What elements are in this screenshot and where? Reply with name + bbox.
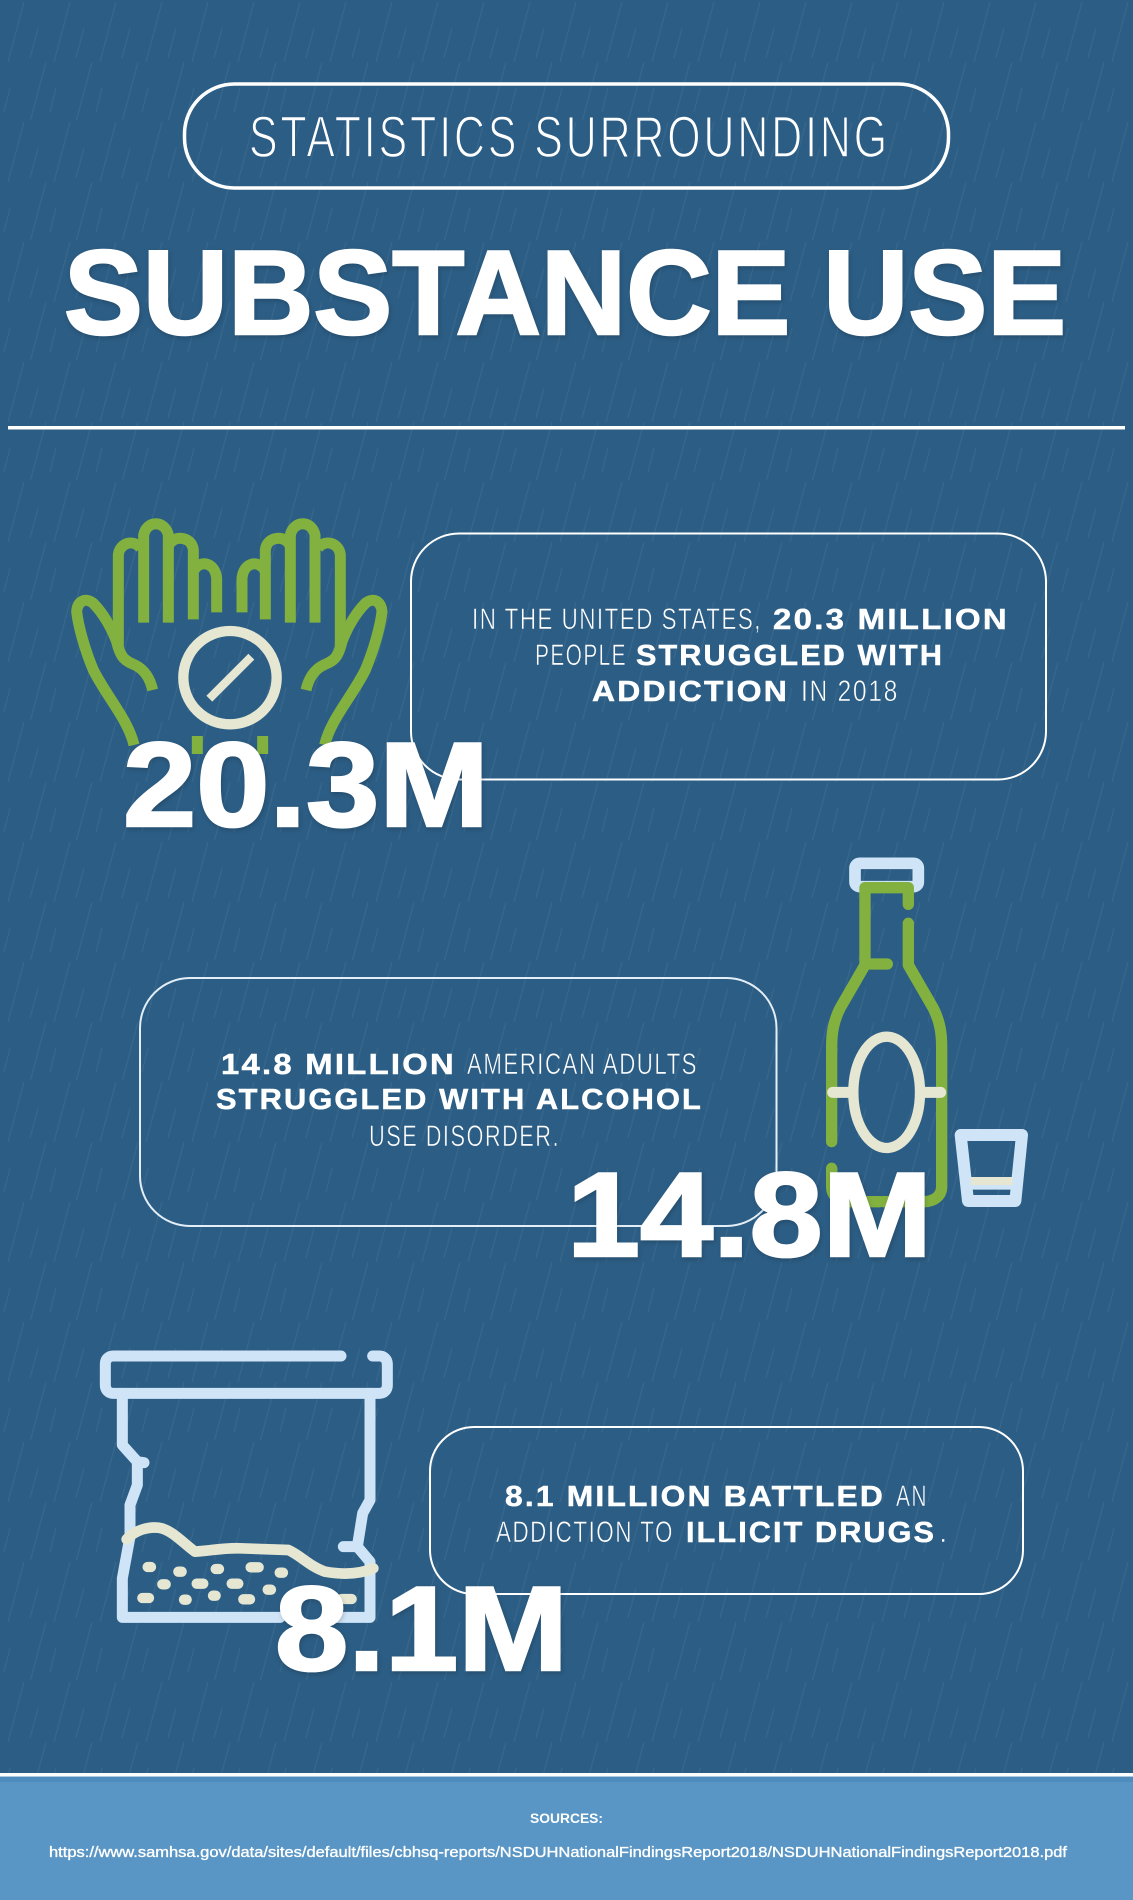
callout box 1 — [411, 534, 1046, 780]
icon: open hands with pill — [77, 524, 382, 754]
icon: bottle and glass — [832, 863, 1022, 1202]
callout text 1 — [472, 603, 1009, 708]
callout text 2: 14.8 MILLION — [221, 1049, 456, 1081]
callout text 2: STRUGGLED WITH ALCOHOL — [216, 1084, 703, 1116]
callout box 2 — [140, 978, 776, 1226]
callout text 3: 8.1 MILLION BATTLED — [505, 1481, 885, 1513]
callout text 1: IN THE UNITED STATES, — [472, 603, 762, 636]
stat: 20.3M: 20.3M — [123, 718, 489, 852]
callout text 1: ADDICTION — [592, 676, 789, 708]
title: SUBSTANCE USE — [64, 226, 1066, 360]
footer: sources — [0, 1773, 1133, 1900]
callout text 3: AN — [896, 1480, 928, 1513]
callout text 1: 20.3 MILLION — [773, 604, 1009, 636]
panel: illicit drugs — [105, 1356, 1023, 1696]
callout text 2: AMERICAN ADULTS — [467, 1048, 698, 1081]
source url: https://www.samhsa.gov/data/sites/default/files/cbhsq-reports/NSDUHNationalFindingsReport2018/NSDUHNationalFindingsReport2018.pdf — [49, 1844, 1068, 1861]
callout text 1: STRUGGLED WITH — [636, 640, 944, 672]
callout text 1: IN 2018 — [801, 675, 899, 708]
panel: alcohol — [140, 863, 1022, 1282]
icon: bag of powder — [105, 1356, 387, 1617]
divider — [8, 426, 1125, 430]
callout text 1: PEOPLE — [535, 639, 627, 672]
stat: 8.1M: 8.1M — [275, 1562, 568, 1696]
callout text 3: . — [939, 1516, 949, 1549]
callout text 2 — [216, 1048, 703, 1153]
callout text 3: ILLICIT DRUGS — [686, 1517, 936, 1549]
stat: 14.8M: 14.8M — [567, 1148, 932, 1282]
callout text 3: ADDICTION TO — [496, 1516, 674, 1549]
panel: addiction — [77, 524, 1046, 852]
sources heading: SOURCES: — [530, 1811, 603, 1826]
callout text 2: USE DISORDER. — [369, 1120, 560, 1153]
callout text 3 — [496, 1480, 949, 1549]
callout box 3 — [430, 1427, 1023, 1594]
header pill — [184, 84, 948, 188]
subtitle: STATISTICS SURROUNDING — [249, 105, 890, 170]
